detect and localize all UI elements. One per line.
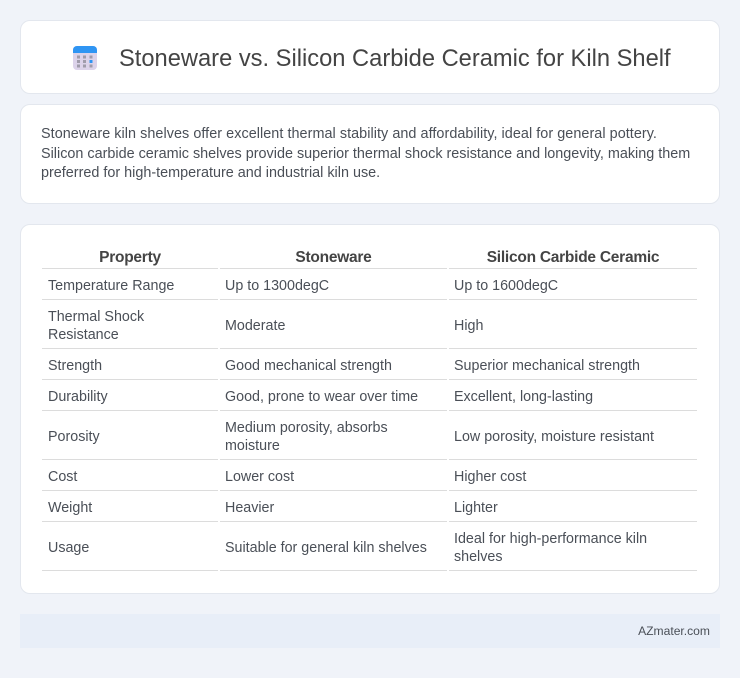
title: Stoneware vs. Silicon Carbide Ceramic for Kiln Shelf	[119, 46, 671, 72]
summary text: Silicon carbide ceramic shelves provide superior thermal shock resistance and longevity, making them	[41, 146, 690, 162]
row: weight: Weight	[48, 500, 92, 516]
comparison table: Higher cost	[454, 469, 526, 485]
row: thermal shock resistance: Resistance	[48, 327, 119, 343]
comparison table: Good, prone to wear over time	[225, 389, 418, 405]
row: porosity: Porosity	[48, 429, 100, 445]
comparison table: Ideal for high-performance kiln	[454, 531, 647, 547]
comparison table: moisture	[225, 438, 280, 454]
comparison table: Medium porosity, absorbs	[225, 420, 388, 436]
row: usage: Usage	[48, 540, 89, 556]
column heading: Stoneware: Stoneware	[295, 249, 372, 266]
comparison table: shelves	[454, 549, 502, 565]
footer bar	[20, 614, 720, 648]
row: thermal shock resistance	[48, 309, 144, 343]
comparison table: Suitable for general kiln shelves	[225, 540, 427, 556]
comparison table: Low porosity, moisture resistant	[454, 429, 654, 445]
summary text	[41, 126, 690, 181]
column heading: Property: Property	[99, 249, 161, 266]
summary panel	[20, 104, 720, 204]
footer credit: AZmater.com	[638, 624, 710, 638]
row: temperature range: Temperature Range	[48, 278, 174, 294]
comparison table: Superior mechanical strength	[454, 358, 640, 374]
row: thermal shock resistance: Thermal Shock	[48, 309, 144, 325]
comparison table: Up to 1300degC	[225, 278, 329, 294]
header panel	[20, 20, 720, 94]
summary text: Stoneware kiln shelves offer excellent thermal stability and affordability, ideal for general pottery.	[41, 126, 657, 142]
summary text: preferred for high-temperature and industrial kiln use.	[41, 165, 380, 181]
comparison table: Lower cost	[225, 469, 294, 485]
comparison table: Heavier	[225, 500, 274, 516]
column heading: Silicon Carbide Ceramic: Silicon Carbide Ceramic	[487, 249, 659, 266]
row: durability: Durability	[48, 389, 108, 405]
comparison table: Up to 1600degC	[454, 278, 558, 294]
comparison table panel	[20, 224, 720, 594]
icon: calendar	[73, 46, 97, 70]
row: cost: Cost	[48, 469, 77, 485]
comparison table: Good mechanical strength	[225, 358, 392, 374]
row: strength: Strength	[48, 358, 102, 374]
comparison table: Moderate	[225, 318, 285, 334]
comparison table: Excellent, long-lasting	[454, 389, 593, 405]
comparison table: High	[454, 318, 483, 334]
comparison table: Lighter	[454, 500, 498, 516]
